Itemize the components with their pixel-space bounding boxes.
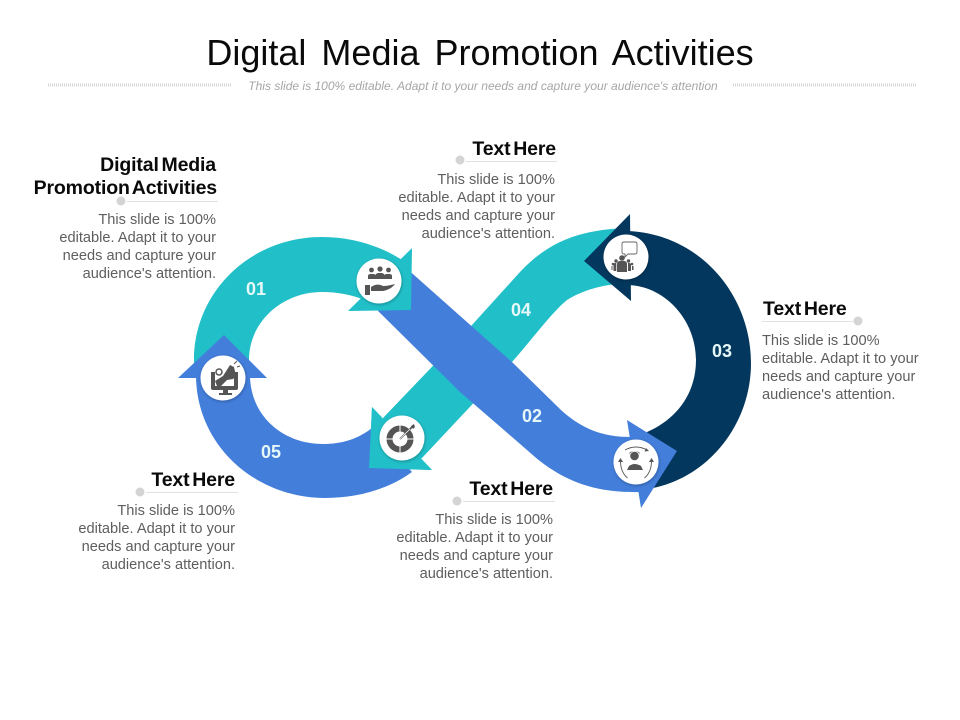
text block: lower left: This slide is 100% — [117, 503, 235, 519]
text block: digital media promotion activities: audience's attention. — [83, 266, 216, 282]
text block: lower left: needs and capture your — [82, 539, 235, 555]
text block: top center: Text Here — [472, 138, 556, 160]
text block: lower left — [78, 469, 238, 573]
number 05: 05 — [261, 442, 281, 462]
segment 03 navy — [584, 214, 751, 488]
title: Digital Media Promotion Activities — [206, 32, 754, 73]
segment 01 teal — [178, 237, 412, 378]
text block: lower center — [396, 478, 555, 582]
text block: top center: audience's attention. — [422, 226, 555, 242]
text block: right: Text Here — [763, 298, 847, 320]
text block: lower left: editable. Adapt it to your — [78, 521, 235, 537]
number 01: 01 — [246, 279, 266, 299]
text block: lower center: This slide is 100% — [435, 512, 553, 528]
icon: audience with hand — [356, 258, 402, 304]
icon: target with dart — [380, 416, 424, 460]
text block: lower center: Text Here — [469, 478, 553, 500]
text block: right: audience's attention. — [762, 387, 895, 403]
text block: digital media promotion activities: editable. Adapt it to your — [59, 230, 216, 246]
text block: digital media promotion activities: Digital Media — [100, 154, 216, 176]
text block: top center: This slide is 100% — [437, 172, 555, 188]
text block: digital media promotion activities: needs and capture your — [63, 248, 216, 264]
text block: lower center: needs and capture your — [400, 548, 553, 564]
number 04: 04 — [511, 300, 531, 320]
text block: top center — [398, 138, 557, 242]
text block: top center: needs and capture your — [402, 208, 555, 224]
segment 04 teal — [369, 228, 631, 470]
segment 02 blue — [372, 267, 677, 508]
icon: group with speech bubble — [604, 234, 648, 280]
text block: lower left: Text Here — [151, 469, 235, 491]
subtitle: This slide is 100% editable. Adapt it to your needs and capture your audience's attention — [248, 79, 718, 93]
text block: lower left: audience's attention. — [102, 557, 235, 573]
text block: right: This slide is 100% — [762, 333, 880, 349]
icon: monitor with megaphone — [200, 356, 246, 400]
text block: right — [762, 298, 919, 403]
text block: right: needs and capture your — [762, 369, 915, 385]
text block: top center: editable. Adapt it to your — [398, 190, 555, 206]
icon: person with cycle arrows — [614, 440, 658, 484]
number 02: 02 — [522, 406, 542, 426]
text block: lower center: editable. Adapt it to your — [396, 530, 553, 546]
infinity diagram — [178, 214, 751, 508]
text block: lower center: audience's attention. — [420, 566, 553, 582]
text block: digital media promotion activities: This slide is 100% — [98, 212, 216, 228]
segment 05 blue — [196, 375, 432, 498]
text block: digital media promotion activities: Promotion Activities — [34, 177, 217, 199]
text block: right: editable. Adapt it to your — [762, 351, 919, 367]
number 03: 03 — [712, 341, 732, 361]
text block: digital media promotion activities — [34, 154, 218, 282]
